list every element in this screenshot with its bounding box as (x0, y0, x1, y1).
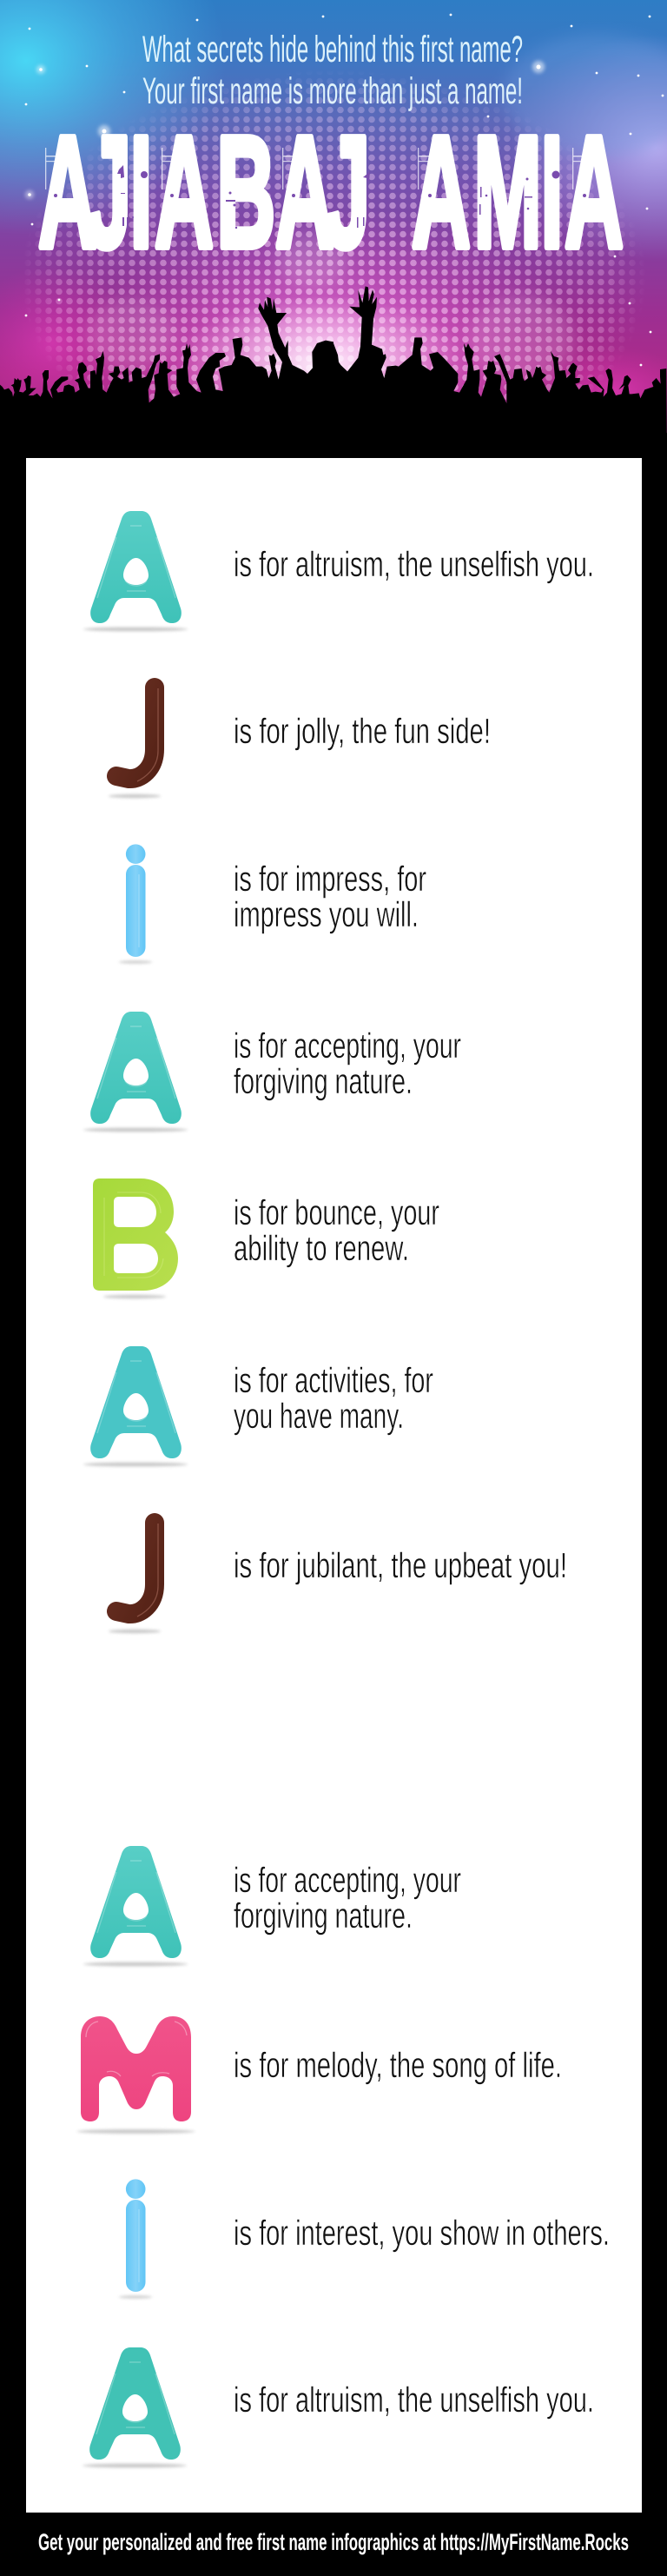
icon: brown letter J (109, 1523, 161, 1633)
icon: pink letter M (76, 2016, 195, 2134)
row: J is for jubilant (109, 1523, 567, 1633)
header banner: concert stage (0, 0, 667, 433)
distress marks on title (45, 148, 586, 229)
row: A is for accepting (second name) (83, 1846, 461, 1966)
text (234, 1860, 461, 1935)
row: M is for melody (76, 2016, 562, 2134)
icon: blue letter i (119, 2179, 152, 2299)
text: is for jolly, the fun side! (234, 711, 491, 751)
text (234, 1360, 433, 1436)
text: forgiving nature. (234, 1895, 413, 1935)
white content panel (26, 458, 642, 2513)
icon: teal letter A (83, 1012, 188, 1132)
text: you have many. (234, 1396, 404, 1436)
text: is for accepting, your (234, 1026, 461, 1066)
text (234, 1026, 461, 1101)
row: A is for activities (83, 1346, 433, 1466)
crowd silhouette (0, 286, 667, 463)
text: is for impress, for (234, 859, 426, 899)
icon: green letter B (93, 1178, 178, 1298)
row: B is for bounce (93, 1178, 439, 1298)
row: A is for altruism (last) (83, 2347, 594, 2467)
icon: green-teal letter A (83, 2347, 187, 2467)
icon: turquoise letter A (83, 1346, 188, 1466)
icon: blue letter i (119, 844, 152, 964)
text (234, 859, 426, 934)
icon: teal letter A (83, 511, 188, 631)
row: A is for accepting (83, 1012, 461, 1132)
text: is for activities, for (234, 1360, 433, 1400)
title: AJIABAJ AMIA: AJIABAJ AMIA (38, 103, 624, 281)
row: J is for jolly (109, 687, 491, 798)
icon: brown letter J (109, 687, 161, 798)
icon: teal letter A (83, 1846, 188, 1966)
text: ability to renew. (234, 1228, 409, 1268)
stage background with lights (0, 0, 667, 433)
subtitle (142, 29, 523, 112)
text: is for accepting, your (234, 1860, 461, 1900)
row: A is for altruism (83, 511, 594, 631)
row: I is for impress (119, 844, 426, 964)
sparkling stars (25, 14, 664, 366)
black band below crowd (0, 433, 667, 459)
text: forgiving nature. (234, 1061, 413, 1101)
text (234, 1192, 439, 1268)
text: is for bounce, your (234, 1192, 439, 1232)
text: impress you will. (234, 894, 419, 934)
row: I is for interest (119, 2179, 610, 2299)
